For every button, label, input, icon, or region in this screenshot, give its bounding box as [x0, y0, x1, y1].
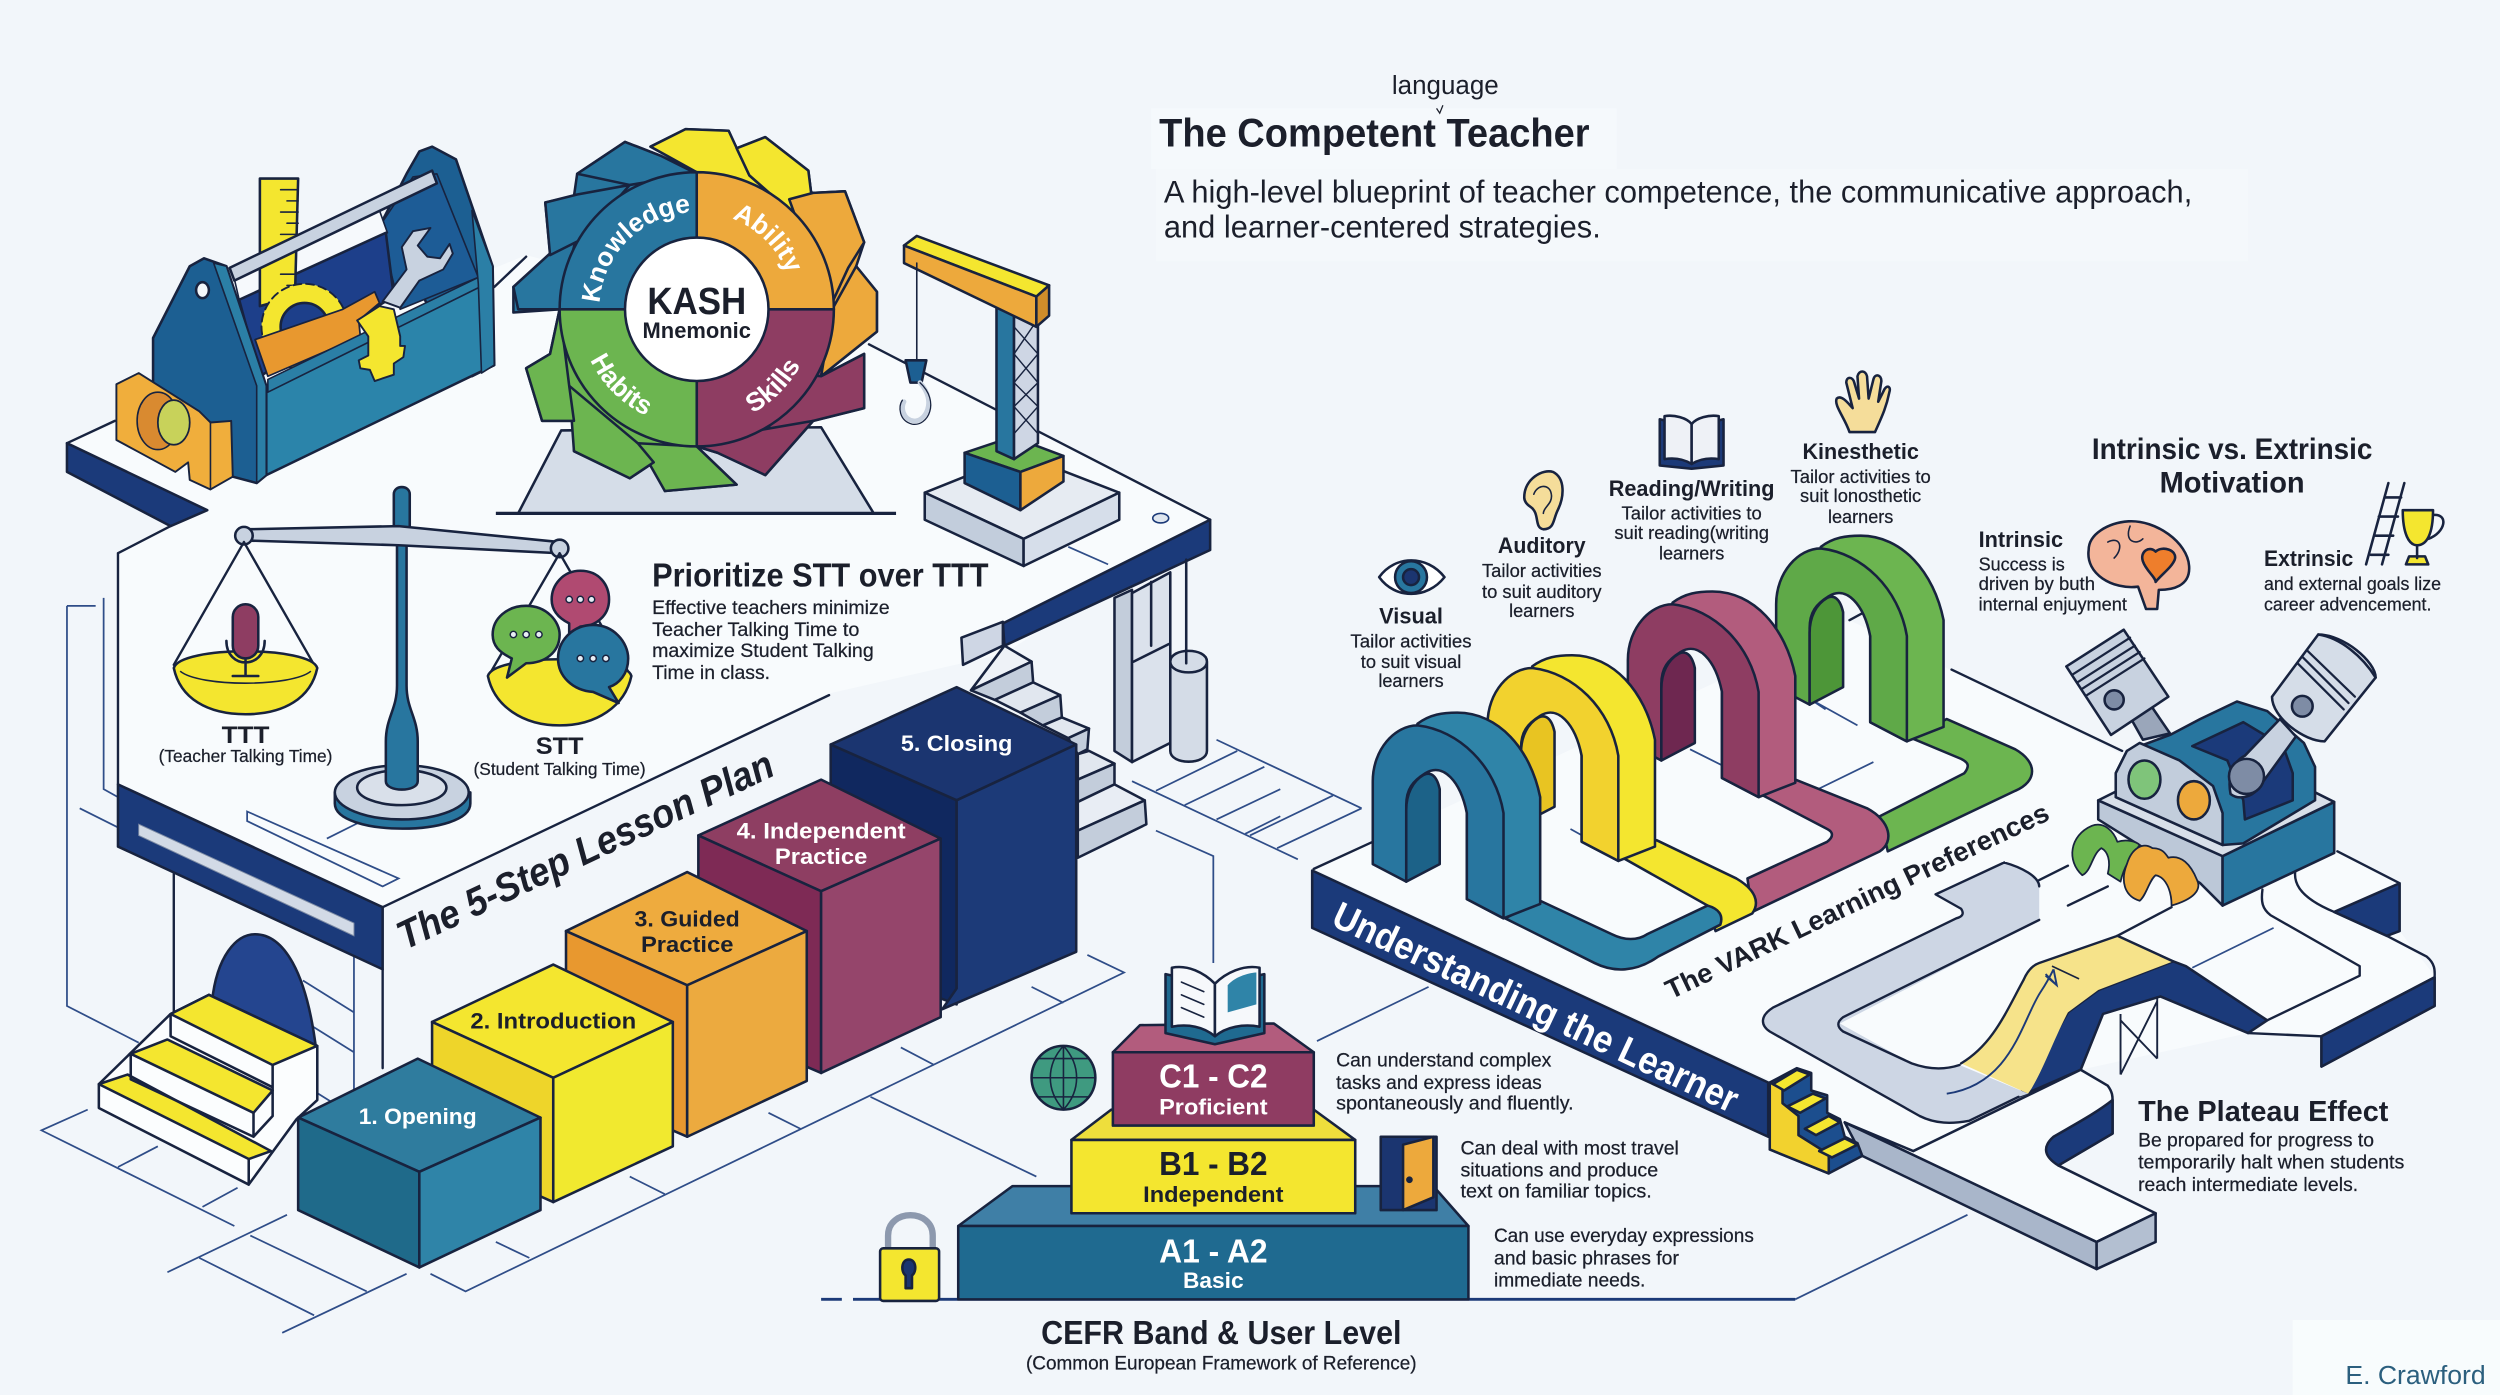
- text block: C level: tasks and express ideas: [1336, 1073, 1542, 1094]
- heading: CEFR band: [1026, 1315, 1417, 1374]
- text block: reading and writing: Tailor activities to: [1621, 503, 1762, 524]
- text block: C level: spontaneously and fluently.: [1336, 1094, 1574, 1115]
- engine housing: [2116, 701, 2315, 845]
- green ribbon: [1880, 719, 2032, 851]
- icon: door: [1381, 1137, 1437, 1210]
- clasp: [357, 306, 405, 381]
- heading: CEFR band: (Common European Framework of Reference): [1026, 1353, 1417, 1374]
- step 3: 3. Guided: [635, 906, 740, 931]
- step 1: 1. Opening: [359, 1104, 477, 1129]
- text block: B level: text on familiar topics.: [1460, 1181, 1652, 1202]
- step 4: [698, 780, 941, 1073]
- step 3: Practice: [641, 932, 733, 957]
- level B: Independent: [1143, 1182, 1284, 1207]
- jib: [904, 236, 1049, 297]
- level A: A1 - A2: [1159, 1234, 1268, 1271]
- fascia slot: [139, 824, 354, 936]
- STT label: STT: [536, 733, 584, 760]
- text block: auditory: to suit auditory: [1482, 581, 1602, 602]
- icon: open book: [1660, 416, 1724, 469]
- heading: understanding the learner: Understanding the Learner: [1326, 894, 1745, 1122]
- icon: eye: [1379, 560, 1445, 594]
- panel: upper platform: [67, 255, 1212, 907]
- icon: balance scale: [174, 487, 631, 829]
- KASH label: [643, 280, 751, 343]
- level A: [958, 1186, 1468, 1299]
- text block: auditory: [1482, 533, 1602, 621]
- mast block: [965, 437, 1063, 472]
- text block: reading and writing: learners: [1659, 543, 1724, 564]
- wrench: [383, 228, 453, 308]
- ring labels: Ability: [732, 205, 800, 270]
- right loop outline: [2117, 851, 2435, 1067]
- text block: kinesthetic: learners: [1828, 506, 1893, 527]
- KASH ring: [560, 172, 834, 446]
- title: language: [1392, 72, 1499, 100]
- right piston: [2230, 719, 2296, 797]
- platform grey end: [961, 622, 1003, 665]
- tape block: [116, 373, 233, 489]
- chart: VARK arches: [1373, 536, 2032, 969]
- icon: engine: [2039, 630, 2376, 906]
- TTT label: (Teacher Talking Time): [159, 746, 332, 766]
- panel: stairs and columns behind steps: [971, 560, 1207, 858]
- text block: B level: situations and produce: [1460, 1161, 1658, 1182]
- navy side of loop: [2321, 977, 2435, 1067]
- heading: five step lesson plan: The 5-Step Lesson Plan: [390, 743, 781, 958]
- text block: intrinsic: internal enjuyment: [1979, 594, 2127, 615]
- left pan TTT: [174, 542, 317, 714]
- staircase: [971, 646, 1146, 858]
- platform navy edge left: [67, 443, 207, 526]
- maroon ribbon: [1747, 780, 1888, 912]
- white gap and back panel: [234, 210, 387, 300]
- KASH label: KASH: [647, 280, 746, 323]
- heading: motivation: Intrinsic vs. Extrinsic: [2092, 433, 2372, 466]
- icon: globe: [1032, 1046, 1095, 1110]
- text block: C level: Can understand complex: [1336, 1051, 1552, 1072]
- panel: right learner platform: [1312, 590, 2435, 1269]
- KASH label: Mnemonic: [643, 318, 751, 343]
- text block: visual: Visual: [1379, 603, 1443, 628]
- pedestal: [925, 454, 1119, 539]
- orange drip: [2124, 846, 2198, 906]
- text block: C level: [1336, 1051, 1574, 1115]
- navy band: [1312, 870, 1768, 1137]
- icon: hand: [1836, 371, 1890, 432]
- entry steps: [99, 995, 317, 1185]
- heading: motivation: Motivation: [2160, 467, 2305, 500]
- text block: reading and writing: Reading/Writing: [1609, 476, 1775, 501]
- heading: VARK learning preferences: The VARK Learning Preferences: [1660, 796, 2054, 1005]
- text block: prioritize STT: Effective teachers minimize: [652, 598, 890, 619]
- text block: extrinsic: Extrinsic: [2264, 546, 2353, 571]
- text block: extrinsic: career advencement.: [2264, 594, 2431, 615]
- text block: extrinsic: and external goals lize: [2264, 573, 2441, 594]
- right pan STT: [488, 553, 631, 725]
- step 2: 2. Introduction: [470, 1008, 636, 1033]
- petals: [513, 129, 877, 491]
- heading: CEFR band: CEFR Band & User Level: [1041, 1315, 1401, 1352]
- blueprint lines: [41, 408, 2066, 1333]
- text block: B level: [1460, 1138, 1679, 1202]
- panel: plateau effect path: [1763, 851, 2435, 1269]
- text block: prioritize STT: Prioritize STT over TTT: [652, 558, 989, 595]
- step 5: [831, 687, 1076, 1009]
- text block: prioritize STT: Time in class.: [652, 663, 770, 684]
- text block: reading and writing: suit reading(writing: [1614, 522, 1769, 543]
- level C: [1113, 1024, 1314, 1126]
- text block: visual: to suit visual: [1361, 651, 1461, 672]
- ring labels: [582, 198, 800, 414]
- gauges: [2129, 760, 2160, 799]
- wheel stand: [518, 427, 874, 513]
- chart: lesson plan steps: [298, 687, 1076, 1267]
- text block: A level: and basic phrases for: [1494, 1248, 1680, 1269]
- text block: auditory: Auditory: [1498, 533, 1586, 558]
- text block: kinesthetic: Tailor activities to: [1790, 466, 1931, 487]
- yellow arch: [1488, 655, 1655, 861]
- left piston: [2066, 630, 2170, 740]
- yellow ramp: [1961, 936, 2173, 1094]
- icon: small stairs: [1770, 1068, 1862, 1173]
- heading: motivation: [2092, 433, 2372, 500]
- step 2: [432, 965, 673, 1202]
- text block: extrinsic: [2264, 546, 2441, 615]
- author credit: E. Crawford: [2345, 1360, 2486, 1390]
- step 1: [298, 1059, 540, 1267]
- navy side ramp: [2018, 936, 2267, 1097]
- mast: [996, 305, 1014, 459]
- icon: microphone: [226, 604, 265, 676]
- step 3: [566, 872, 807, 1137]
- grey ribbon: [1763, 863, 2039, 1123]
- white lower path: [1845, 1070, 2156, 1242]
- text block: visual: learners: [1378, 670, 1444, 691]
- base line: [821, 1298, 1795, 1300]
- text block: reading and writing: [1609, 476, 1775, 564]
- subtitle: A high-level blueprint of teacher competence, the communicative approach,: [1164, 173, 2192, 209]
- text block: intrinsic: Intrinsic: [1979, 527, 2063, 552]
- step 4: Practice: [775, 844, 867, 869]
- text block: intrinsic: [1979, 527, 2127, 615]
- title: The Competent Teacher: [1159, 112, 1590, 156]
- text block: kinesthetic: [1790, 439, 1931, 527]
- text block: A level: [1494, 1226, 1754, 1292]
- subtitle: and learner-centered strategies.: [1164, 209, 1601, 245]
- subtitle: [1164, 173, 2192, 245]
- handle: [230, 171, 437, 281]
- maroon arch: [1628, 591, 1795, 797]
- text block: visual: [1350, 603, 1472, 691]
- speech bubbles: [493, 571, 628, 703]
- TTT label: [159, 722, 332, 766]
- engine plate right: [2223, 802, 2334, 906]
- blue ribbon: [1505, 901, 1721, 969]
- blue arch: [1373, 713, 1540, 918]
- STT label: (Student Talking Time): [474, 759, 646, 779]
- orange material: [255, 292, 379, 376]
- ring labels: Skills: [746, 360, 799, 411]
- trestle support: [2121, 996, 2157, 1075]
- text block: prioritize STT: [652, 558, 989, 684]
- text block: plateau effect: reach intermediate levels.: [2138, 1175, 2358, 1196]
- title: [1159, 72, 1590, 156]
- level B: B1 - B2: [1159, 1146, 1268, 1183]
- icon: toolbox: [116, 147, 494, 489]
- text block: A level: immediate needs.: [1494, 1271, 1645, 1292]
- scale beam: [244, 526, 560, 553]
- grey band: [1845, 1122, 2097, 1269]
- text block: plateau effect: The Plateau Effect: [2138, 1096, 2389, 1128]
- chart: CEFR pyramid: [958, 1024, 1468, 1299]
- icon: ladder and trophy: [2366, 483, 2443, 564]
- text block: intrinsic: Success is: [1979, 554, 2065, 575]
- text block: A level: Can use everyday expressions: [1494, 1226, 1754, 1247]
- cable and hook: [916, 263, 918, 363]
- scale base: [335, 765, 470, 829]
- yellow ribbon: [1620, 840, 1756, 931]
- text block: intrinsic: driven by buth: [1979, 573, 2095, 594]
- level C: C1 - C2: [1159, 1058, 1268, 1095]
- text block: auditory: Tailor activities: [1482, 560, 1602, 581]
- STT label: [474, 733, 646, 779]
- level B: [1071, 1110, 1355, 1213]
- text block: kinesthetic: Kinesthetic: [1802, 439, 1919, 464]
- icon: ear: [1524, 471, 1563, 529]
- icon: brain with heart: [2088, 521, 2189, 609]
- TTT label: TTT: [222, 722, 270, 749]
- level A: Basic: [1183, 1268, 1244, 1293]
- platform navy edge right: [1003, 520, 1210, 646]
- step 5: 5. Closing: [901, 731, 1012, 756]
- text block: B level: Can deal with most travel: [1460, 1138, 1679, 1159]
- text block: prioritize STT: maximize Student Talking: [652, 641, 874, 662]
- toolbox left end: [153, 258, 266, 483]
- ring labels: Knowledge: [582, 198, 690, 302]
- icon: padlock: [880, 1215, 939, 1301]
- toolbox right end: [379, 147, 494, 376]
- level C: Proficient: [1159, 1094, 1268, 1119]
- ring labels: Habits: [590, 352, 650, 414]
- green drip: [2072, 825, 2140, 882]
- growth arrow: [1947, 969, 2057, 1094]
- scale post: [386, 487, 418, 790]
- text block: plateau effect: temporarily halt when students: [2138, 1153, 2404, 1174]
- text block: plateau effect: Be propared for progress to: [2138, 1130, 2374, 1151]
- text block: auditory: learners: [1509, 600, 1574, 621]
- engine plate top: [2098, 773, 2334, 856]
- text block: prioritize STT: Teacher Talking Time to: [652, 620, 859, 641]
- text block: kinesthetic: suit lonosthetic: [1800, 485, 1921, 506]
- building fascia: [118, 784, 383, 969]
- navy triangle: [2334, 883, 2400, 936]
- columns: [1114, 560, 1207, 762]
- gear: [261, 284, 348, 370]
- icon: crane: [900, 236, 1119, 566]
- text block: visual: Tailor activities: [1350, 630, 1472, 651]
- green arch: [1776, 536, 1944, 741]
- petal backing: [513, 129, 877, 491]
- toolbox front: [266, 284, 494, 475]
- step 4: 4. Independent: [737, 819, 906, 844]
- engine plate left: [2098, 800, 2223, 906]
- ruler: [260, 179, 298, 306]
- icon: book on pyramid: [1165, 967, 1264, 1044]
- panel: KASH wheel: [496, 128, 896, 515]
- panel: building with stairs: [99, 784, 383, 1185]
- arch doorway: [212, 934, 316, 1046]
- text block: plateau effect: [2138, 1096, 2404, 1196]
